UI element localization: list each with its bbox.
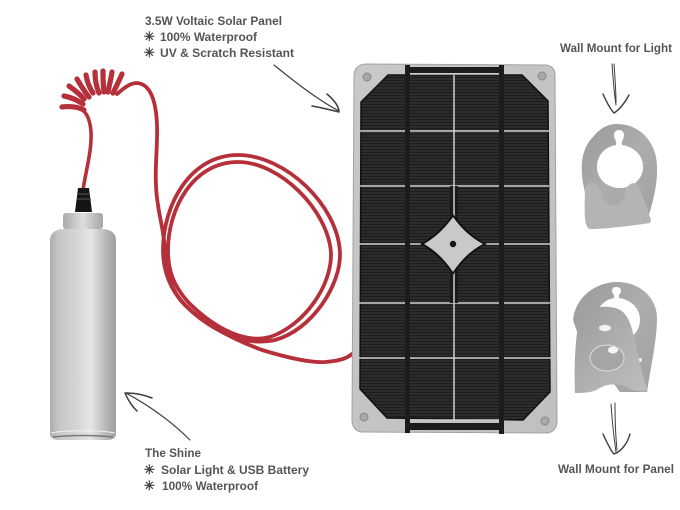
label: The Shine specifications (144, 448, 310, 494)
cell grid lines (359, 74, 551, 420)
arrow: wall mount for light (603, 64, 629, 113)
label: solar panel specifications: ✳ (144, 46, 155, 61)
solar cells (360, 75, 550, 420)
corner screws (360, 72, 549, 425)
black cable connector (75, 188, 92, 212)
solar panel (352, 64, 557, 434)
panel frame (352, 64, 557, 433)
coiled cable (62, 71, 122, 190)
The Shine cylinder light (50, 213, 116, 440)
label: solar panel specifications: ✳ (144, 30, 155, 45)
arrow: wall mount for panel (603, 403, 630, 454)
centre diamond (420, 214, 487, 275)
wall mount for panel (573, 282, 657, 393)
central channel (450, 186, 458, 303)
vertical straps (405, 65, 410, 433)
label: solar panel specifications (144, 16, 294, 61)
arrow: solar panel label to panel (274, 65, 339, 112)
red cable from coil to solar panel (117, 83, 352, 362)
label: The Shine specifications: 100% Waterproof (162, 481, 258, 493)
label: The Shine specifications: The Shine (145, 448, 201, 460)
label: solar panel specifications: 3.5W Voltaic Solar Panel (145, 16, 282, 28)
wall mount for light (582, 124, 657, 229)
label: The Shine specifications: Solar Light & USB Battery (161, 465, 310, 477)
label: wall mount for panel: Wall Mount for Panel (558, 464, 674, 476)
arrow: The Shine label to cylinder (125, 393, 190, 440)
label: The Shine specifications: ✳ (144, 479, 155, 494)
label: solar panel specifications: 100% Waterproof (160, 32, 257, 44)
label: solar panel specifications: UV & Scratch Resistant (160, 48, 294, 60)
label: The Shine specifications: ✳ (144, 463, 155, 478)
label: wall mount for light: Wall Mount for Light (560, 43, 672, 55)
